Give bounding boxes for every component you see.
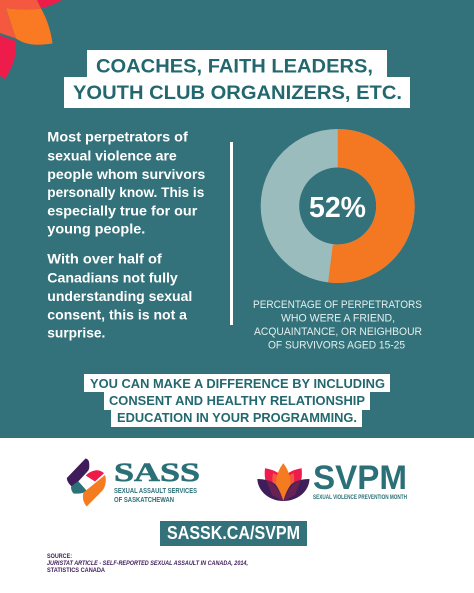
text block: body copy: surprise. bbox=[47, 325, 105, 341]
text block: body copy: personally know. This is bbox=[47, 184, 204, 200]
text block: body copy: especially true for our bbox=[47, 203, 198, 219]
panel: teal main background bbox=[0, 0, 474, 438]
text block: source bbox=[47, 554, 248, 574]
heading: COACHES, FAITH LEADERS, bbox=[96, 56, 373, 78]
callout: call to action bbox=[84, 374, 390, 427]
callout: call to action: CONSENT AND HEALTHY RELATIONSHIP bbox=[109, 393, 365, 408]
icon: corner flower petals bbox=[0, 0, 62, 79]
logo: SASS bbox=[67, 458, 200, 506]
chart caption: ACQUAINTANCE, OR NEIGHBOUR bbox=[254, 326, 422, 338]
heading: YOUTH CLUB ORGANIZERS, ETC. bbox=[73, 82, 402, 104]
text block: body copy: understanding sexual bbox=[47, 288, 192, 304]
donut chart: 52% bbox=[280, 129, 415, 283]
logo subtitle: SVPM: SEXUAL VIOLENCE PREVENTION MONTH bbox=[313, 495, 407, 501]
logo subtitle: SASS: SEXUAL ASSAULT SERVICES bbox=[114, 488, 197, 495]
text block: source: STATISTICS CANADA bbox=[47, 568, 106, 574]
icon: SASS mark bbox=[67, 458, 106, 506]
text block: body copy: With over half of bbox=[47, 250, 162, 266]
text block: body copy bbox=[47, 129, 206, 341]
callout: call to action: YOU CAN MAKE A DIFFERENCE BY INCLUDING bbox=[90, 376, 385, 391]
text block: body copy: consent, this is not a bbox=[47, 306, 187, 322]
text block: body copy: young people. bbox=[47, 220, 145, 236]
text block: source: JURISTAT ARTICLE - SELF-REPORTED SEXUAL ASSAULT IN CANADA, 2014, bbox=[47, 561, 248, 567]
text block: body copy: people whom survivors bbox=[47, 166, 206, 182]
chart caption bbox=[253, 299, 422, 352]
donut chart: 52%: 52% bbox=[309, 192, 366, 224]
text block: body copy: Canadians not fully bbox=[47, 269, 178, 285]
button: website link: SASSK.CA/SVPM bbox=[167, 523, 300, 543]
panel: white footer background bbox=[0, 438, 474, 593]
text block: body copy: sexual violence are bbox=[47, 147, 177, 163]
chart caption: WHO WERE A FRIEND, bbox=[281, 312, 395, 324]
chart caption: PERCENTAGE OF PERPETRATORS bbox=[253, 299, 422, 311]
logo subtitle: SASS bbox=[114, 488, 197, 504]
text block: source: SOURCE: bbox=[47, 554, 72, 560]
icon: lotus bbox=[257, 463, 310, 501]
vertical divider bbox=[230, 142, 233, 325]
logo: SVPM bbox=[257, 459, 407, 501]
logo subtitle: SASS: OF SASKATCHEWAN bbox=[114, 497, 174, 504]
chart caption: OF SURVIVORS AGED 15-25 bbox=[268, 340, 405, 352]
logo wordmark: SVPM: SVPM bbox=[313, 459, 407, 497]
heading bbox=[64, 50, 410, 108]
callout: call to action: EDUCATION IN YOUR PROGRAMMING. bbox=[117, 410, 357, 425]
logo wordmark: SASS: SASS bbox=[114, 458, 200, 487]
text block: body copy: Most perpetrators of bbox=[47, 129, 188, 145]
